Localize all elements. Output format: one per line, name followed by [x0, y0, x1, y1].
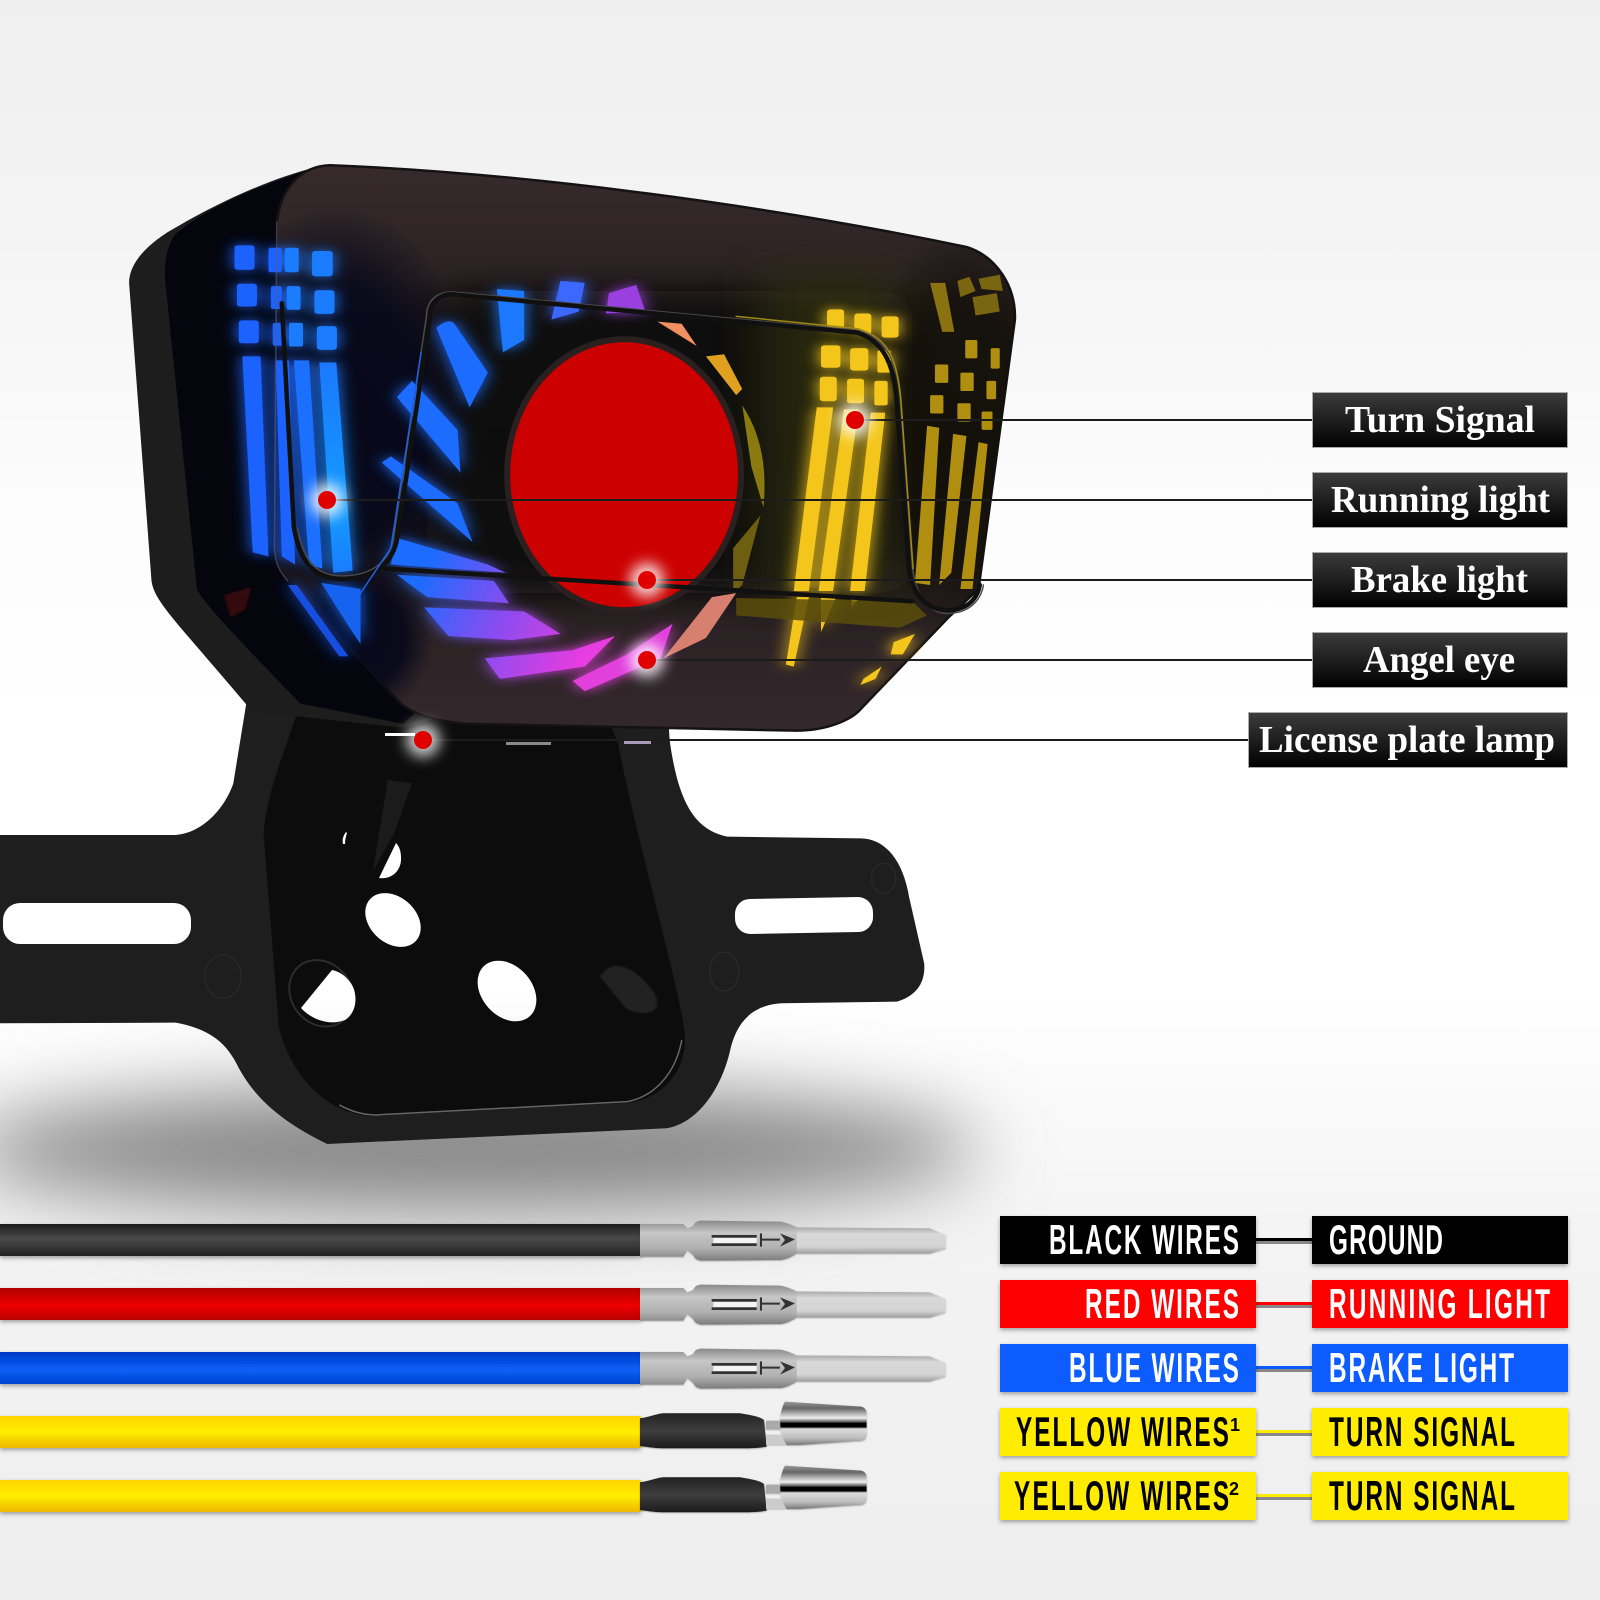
yellow reflection band — [736, 598, 927, 628]
license plate bracket — [0, 690, 924, 1144]
legend row: yellow wires 2 to turn signal: 2 — [1229, 1479, 1239, 1499]
marker: license plate lamp — [385, 723, 440, 757]
warm blades — [657, 322, 765, 658]
callout labels — [1248, 392, 1568, 768]
label: turn signal: Turn Signal — [1345, 399, 1535, 441]
wiring legend — [1000, 1216, 1568, 1520]
lens window frame — [282, 292, 983, 622]
label: brake light — [1312, 552, 1568, 608]
label: license plate lamp: License plate lamp — [1259, 719, 1555, 761]
dim yellow reflections — [915, 275, 1003, 589]
callout marker dots — [310, 403, 872, 757]
lower housing strip — [385, 731, 527, 748]
bracket inner recessed panel — [264, 713, 685, 1116]
legend row: yellow wires 1 to turn signal — [1000, 1408, 1568, 1456]
left lens highlight edge — [274, 222, 288, 581]
marker: brake light — [630, 563, 664, 597]
bracket ground shadow — [0, 1088, 980, 1212]
label: angel eye: Angel eye — [1363, 639, 1515, 681]
wire: blue — [0, 1352, 641, 1384]
wire: red — [0, 1288, 641, 1320]
legend row: yellow wires 1 to turn signal: 1 — [1230, 1415, 1240, 1435]
legend row: red wires to running light: RED WIRES — [1085, 1281, 1239, 1328]
brake light disc — [507, 339, 741, 610]
bracket inner highlights — [205, 780, 896, 1115]
housing dark side — [165, 169, 464, 724]
callout leader lines — [327, 420, 1312, 740]
legend row: yellow wires 1 to turn signal: YELLOW WIRES — [1016, 1409, 1229, 1456]
legend row: red wires to running light: RUNNING LIGHT — [1329, 1281, 1550, 1328]
yellow LED strips — [786, 309, 915, 685]
pin terminal: blue wire — [640, 1349, 946, 1389]
label: brake light: Brake light — [1351, 559, 1528, 601]
lens body — [274, 165, 1015, 731]
housing red reflection — [224, 587, 251, 618]
pin terminal: red wire — [640, 1285, 946, 1325]
legend row: yellow wires 1 to turn signal: TURN SIGNAL — [1329, 1409, 1515, 1456]
legend row: black wires to ground: BLACK WIRES — [1049, 1217, 1239, 1264]
legend row: blue wires to brake light: BLUE WIRES — [1069, 1345, 1239, 1392]
legend row: red wires to running light — [1000, 1280, 1568, 1328]
bullet connector: yellow wire 2 — [640, 1466, 867, 1512]
swirl angel eye blades — [382, 281, 673, 691]
wires — [0, 1224, 641, 1512]
wire: yellow 2 — [0, 1480, 641, 1512]
pin terminal: black wire — [640, 1221, 946, 1261]
label: turn signal — [1312, 392, 1568, 448]
wire: black — [0, 1224, 641, 1256]
wire: yellow 1 — [0, 1416, 641, 1448]
label: running light — [1312, 472, 1568, 528]
lamp rear housing — [129, 167, 464, 728]
marker: angel eye — [630, 643, 664, 677]
legend row: black wires to ground — [1000, 1216, 1568, 1264]
legend row: blue wires to brake light: BRAKE LIGHT — [1329, 1345, 1514, 1392]
blue LED strips — [235, 245, 361, 656]
legend row: black wires to ground: GROUND — [1329, 1217, 1443, 1264]
underside lamp glints — [506, 741, 651, 745]
metal pin terminals — [640, 1221, 946, 1512]
bullet connector: yellow wire 1 — [640, 1402, 867, 1448]
label: running light: Running light — [1331, 479, 1550, 521]
lens inner shading — [276, 223, 1014, 697]
bracket outer plate — [0, 690, 924, 1144]
legend row: blue wires to brake light — [1000, 1344, 1568, 1392]
legend row: yellow wires 2 to turn signal — [1000, 1472, 1568, 1520]
legend row: yellow wires 2 to turn signal: YELLOW WIRES — [1014, 1473, 1229, 1520]
marker: turn signal — [838, 403, 872, 437]
legend row: yellow wires 2 to turn signal: TURN SIGNAL — [1329, 1473, 1515, 1520]
marker: running light — [310, 483, 344, 517]
tail light lamp — [129, 165, 1069, 748]
label: angel eye — [1312, 632, 1568, 688]
